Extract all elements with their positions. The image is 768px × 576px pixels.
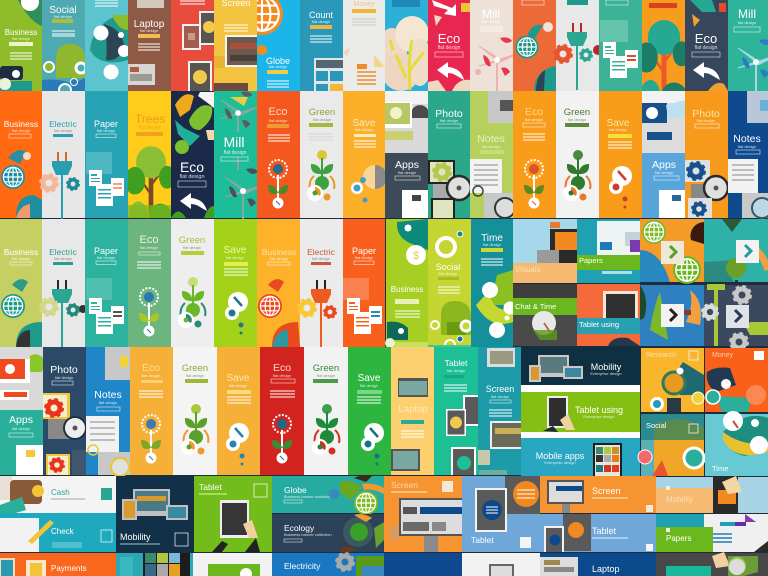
panel: tree card (704, 219, 768, 282)
panel: Screen wide: Screen (592, 486, 621, 496)
panel: Electricity (272, 553, 384, 576)
panel: Business olive (0, 219, 42, 347)
row 1 of vertical banners (0, 0, 768, 91)
panel: Research: Research (646, 352, 676, 359)
panel: Electric teal (40, 219, 87, 347)
panel: Save amber (599, 91, 642, 218)
panel: Eco amber: Eco (525, 106, 543, 118)
panel: Save amber: flat design (609, 127, 627, 132)
panel: Paper green (599, 0, 642, 91)
panel: Business amber: Business (262, 247, 296, 257)
panel: Globe: Globe (266, 56, 290, 66)
panel: Business: Business (5, 28, 37, 37)
panel: Business orange: Business (4, 119, 38, 129)
panel: Money: Money (712, 352, 734, 359)
panel: Mobility tall (116, 476, 193, 552)
panel: Eco sage (128, 219, 171, 347)
panel: Check (0, 513, 116, 552)
panel: Mill teal: flat design (738, 20, 756, 25)
panel: Ecology: Business banner collection (284, 532, 332, 537)
panel: Eco amber: flat design (525, 117, 543, 122)
panel: Photo orange: flat design (697, 118, 715, 123)
panel: Globe: flat design (269, 64, 287, 69)
panel: Photo green: flat design (440, 118, 458, 123)
panel: Globe banner: Business banner collection (284, 494, 332, 499)
panel: Business olive: flat design (12, 256, 30, 261)
panel: Electricity: Electricity (284, 561, 321, 571)
panel: Save lime: Save (224, 245, 247, 256)
panel: Mill teal: Mill (738, 7, 756, 21)
panel: Tablet teal: flat design (447, 368, 465, 373)
panel: Chat and Time dark (656, 552, 768, 576)
panel: Mill teal bright: Mill (224, 134, 244, 150)
panel: Ecology (272, 514, 384, 552)
panel: Green grey (300, 91, 343, 218)
panel: Tablet lime (194, 476, 272, 552)
panel: Paper teal: Paper (94, 246, 118, 256)
panel: Business orange-red (513, 0, 556, 91)
panel: Notes lime: Notes (477, 133, 505, 145)
panel: Electric (40, 91, 85, 219)
panel: white tablet (193, 553, 272, 576)
panel: Social lime: flat design (439, 271, 457, 276)
panel: Business lime: $ (413, 250, 419, 262)
panel: Apps teal: flat design (12, 426, 30, 431)
panel: Notes blue (86, 347, 130, 476)
panel: Mobile apps phone (116, 553, 193, 576)
panel: Time teal: flat design (483, 242, 501, 247)
panel: Electric teal: Electric (49, 247, 78, 257)
panel: Laptop navy (540, 553, 656, 576)
panel: Mobility navy (521, 347, 640, 386)
panel: Laptop (128, 0, 171, 91)
panel: Mill pale (470, 0, 519, 120)
panel: Time teal (471, 219, 516, 347)
panel: Apps blue: flat design (655, 170, 673, 175)
panel: Screen teal: Screen (486, 384, 514, 394)
panel: Count: flat design (312, 19, 330, 24)
panel: Photo green (428, 91, 471, 218)
panel: Screen teal (478, 347, 521, 475)
panel: Notes navy (728, 91, 768, 218)
panel: Globe (257, 0, 300, 91)
panel: Save amber: Save (607, 118, 630, 129)
panel: Eco slate: flat design (695, 45, 718, 51)
panel: Trees yellow: flat design (139, 125, 162, 131)
panel: Tablet teal (434, 347, 478, 475)
panel: Eco yellow: flat design (142, 373, 160, 378)
panel: Payments: Payments (51, 564, 87, 573)
panel: Notes lime (470, 91, 515, 218)
panel: Mill pale: Mill (482, 7, 500, 21)
panel: Mill teal (728, 0, 768, 122)
square cards block: arrows (640, 219, 768, 350)
panel: Laptop yellow (391, 347, 434, 475)
panel: Eco red: Eco (273, 362, 291, 374)
panel: Electric orange: Electric (307, 247, 336, 257)
panel: Green white: flat design (568, 117, 586, 122)
panel: Eco yellow: Eco (142, 362, 160, 374)
panel: Business amber: flat design (270, 256, 288, 261)
panel: Photo navy: flat design (55, 375, 73, 380)
panel: Eco amber (513, 91, 556, 218)
panel: Social card: Social (646, 421, 667, 430)
panel: Tablet lime: Tablet (199, 482, 222, 492)
panel: Photo navy (43, 347, 86, 475)
panel: Time (85, 0, 130, 91)
panel: Photo green: Photo (435, 108, 463, 120)
panel: Notes navy: flat design (738, 144, 756, 149)
panel: Green lime text (171, 219, 214, 347)
panel: Mobile apps (521, 438, 640, 476)
panel: Time card: Time (712, 464, 728, 473)
panel: Business amber (257, 219, 300, 347)
panel: Save orange: Save (353, 118, 376, 129)
panel: Save yellow (217, 347, 260, 475)
panel: plug card (702, 284, 768, 350)
panel: Mobility card (656, 476, 768, 513)
panel: Business olive: Business (4, 247, 38, 257)
panel: Screen red (171, 0, 215, 91)
panel: Business orange (0, 91, 42, 218)
panel: Paper teal (85, 219, 128, 347)
panel: Mobile apps: Mobile apps (536, 451, 585, 461)
row 4 of vertical banners (0, 347, 521, 476)
panel: Green grey: Green (309, 107, 335, 118)
panel: Social lime (428, 219, 471, 350)
panel: Green white one: flat design (186, 373, 204, 378)
panel: Count grey: Money (353, 1, 375, 8)
panel: Electric orange (298, 219, 343, 347)
panel: Eco yellow (130, 347, 173, 475)
panel: Paper (85, 91, 128, 218)
panel: Business lime: Business (391, 285, 423, 294)
panel: Count: Count (309, 10, 334, 20)
panel: Apps slate: flat design (398, 170, 416, 175)
panel: Save lime: flat design (226, 255, 244, 260)
panel: Green grey: flat design (313, 117, 331, 122)
panel: Green white one (173, 347, 217, 475)
panel: Trees yellow: Trees (135, 112, 165, 126)
panel: Eco navy: Eco (180, 159, 204, 175)
panel: Social lime: Social (436, 262, 460, 272)
panel: Photo navy: Photo (50, 364, 78, 376)
panel: Electric orange: flat design (312, 256, 330, 261)
panel: Green white two (304, 347, 348, 475)
panel: Eco crimson (428, 0, 470, 91)
panel: Electric: Electric (49, 119, 78, 129)
panel: Notes blue: Notes (94, 389, 122, 401)
panel: Mobility card: Mobility (666, 495, 693, 504)
panel: Count (300, 0, 343, 91)
panel: Tablet wide: Tablet (592, 526, 617, 536)
panel: Screen wide (540, 476, 656, 513)
panel: Tablet using top: Tablet using (579, 320, 619, 329)
panel: Mill teal bright: flat design (224, 150, 247, 156)
panel: Social: Social (49, 5, 77, 16)
panel: Eco navy: flat design (179, 174, 205, 180)
panel: Save green (348, 347, 391, 475)
panel: Apps slate (385, 91, 428, 218)
panel: Business lime (385, 219, 428, 348)
panel: Business (0, 0, 42, 91)
row 5 of horizontal banners (0, 475, 768, 552)
panel: Mobile apps: Enterprise design (544, 460, 576, 465)
panel: Eco red: flat design (273, 373, 291, 378)
panel: Paper orange (343, 219, 385, 347)
panel: Business: flat design (12, 36, 30, 41)
panel: Laptop: flat design (140, 28, 158, 33)
panel: Tablet blue: Tablet (471, 535, 494, 545)
panel: Tablet using lime: Tablet using (575, 405, 623, 415)
horizontal banners block: Visuals, Papers, Chat & Time, Tablet using (513, 219, 640, 346)
panel: Paper: Paper (94, 119, 118, 129)
panel: Tablet using lime (521, 385, 640, 439)
panel: Eco navy (171, 91, 214, 218)
row 2 of vertical banners (0, 91, 768, 219)
panel: Eco crimson: flat design (438, 45, 461, 51)
panel: Save yellow: flat design (229, 383, 247, 388)
panel: Trees orange (642, 0, 685, 91)
panel: Papers top: Papers (579, 256, 603, 265)
panel: Mobility tall: Mobility (120, 532, 151, 542)
panel: Save orange (343, 91, 387, 218)
panel: Eco red-orange: Eco (269, 106, 287, 118)
panel: Social: flat design (54, 14, 72, 19)
panel: Green lime text: Green (179, 235, 205, 246)
panel: Screen teal: flat design (491, 394, 509, 399)
panel: Laptop navy: Laptop (592, 564, 620, 574)
panel: Save lime (214, 219, 257, 347)
panel: Cash (0, 476, 116, 516)
panel: Eco crimson: Eco (438, 31, 460, 46)
panel: Photo orange: Photo (692, 108, 720, 120)
panel: Electric teal: flat design (54, 256, 72, 261)
panel: Paper orange: Paper (352, 246, 376, 256)
panel: Ecology: Ecology (284, 523, 315, 533)
panel: Notes lime: flat design (482, 144, 500, 149)
panel: Paper: flat design (97, 128, 115, 133)
panel: Laptop yellow: Laptop (398, 404, 428, 415)
panel: Save green: Save (358, 373, 381, 384)
panel: Green white: Green (564, 107, 590, 118)
panel: Eco sage: Eco (140, 234, 158, 246)
panel: Save yellow: Save (227, 373, 250, 384)
panel: Mobility navy: Enterprise design (590, 371, 622, 376)
panel: Photo orange (685, 91, 728, 218)
panel: Green white (556, 91, 599, 218)
panel: Green white one: Green (182, 363, 208, 374)
panel: Screen yellow (214, 0, 257, 91)
panel: Save green: flat design (360, 383, 378, 388)
panel: Green lime text: flat design (183, 245, 201, 250)
panel: Globe banner: Globe (284, 485, 307, 495)
panel: Notes navy: Notes (733, 133, 761, 145)
panel: Trees yellow (128, 91, 171, 218)
panel: Tablet blue (462, 476, 540, 552)
panel: Time teal: Time (481, 233, 503, 244)
panel: Laptop white (462, 553, 540, 576)
panel: Tablet wide (540, 514, 656, 552)
panel: phone card (640, 285, 704, 346)
panel: Count grey (343, 0, 385, 91)
panel: Mobility navy: Mobility (591, 362, 622, 372)
row 3 of vertical banners (0, 219, 516, 350)
panel: Apps teal: Apps (9, 414, 33, 426)
panel: Business orange: flat design (12, 128, 30, 133)
panel: Notes blue: flat design (99, 400, 117, 405)
panel: Electric grey (554, 0, 603, 91)
horizontal banners block: Mobility, Tablet using, Mobile apps (521, 347, 640, 476)
panel: Mill pale: flat design (482, 19, 500, 24)
panel: Save orange: flat design (355, 127, 373, 132)
panel: Screen orange (384, 476, 462, 552)
panel: Eco red-orange: flat design (269, 118, 287, 123)
panel: Green white two: flat design (317, 373, 335, 378)
panel: Papers card (656, 514, 768, 552)
panel: Laptop: Laptop (134, 19, 165, 30)
panel: Screen orange: Screen (391, 480, 418, 490)
panel: Mill teal bright (214, 91, 265, 251)
panel: Apps blue (642, 91, 685, 218)
panel: Eco sage: flat design (140, 245, 158, 250)
panel: Eco slate (685, 0, 728, 91)
panel: Paper orange: flat design (355, 255, 373, 260)
panel: Notes navy wide (384, 553, 462, 576)
panel: Eco red (260, 347, 304, 475)
panel: Papers card: Papers (666, 534, 691, 543)
panel: Chat and Time: Chat & Time (515, 302, 556, 311)
panel: Apps blue: Apps (652, 159, 676, 171)
panel: Tablet teal: Tablet (445, 358, 468, 368)
panel: Apps teal (0, 347, 45, 475)
panel: Green white two: Green (313, 363, 339, 374)
square cards block: Research, Money, Social, Time (638, 348, 768, 476)
panel: Payments (0, 553, 116, 576)
panel: Paper teal: flat design (97, 255, 115, 260)
panel: Eco red-orange (257, 91, 300, 218)
panel: Tablet using lime: Enterprise design (583, 414, 615, 419)
panel: globe card (640, 219, 704, 284)
panel: Apps slate: Apps (395, 159, 419, 171)
panel: Cash: Cash (51, 488, 70, 497)
row 6 of horizontal banners (0, 552, 768, 576)
panel: Electric: flat design (54, 128, 72, 133)
panel: Trees blue (385, 0, 428, 91)
panel: Check: Check (51, 527, 75, 536)
panel: Eco slate: Eco (695, 31, 717, 46)
panel: Globe banner (272, 475, 384, 515)
panel: Visuals: Visuals (515, 265, 541, 274)
panel: Social (42, 0, 86, 96)
